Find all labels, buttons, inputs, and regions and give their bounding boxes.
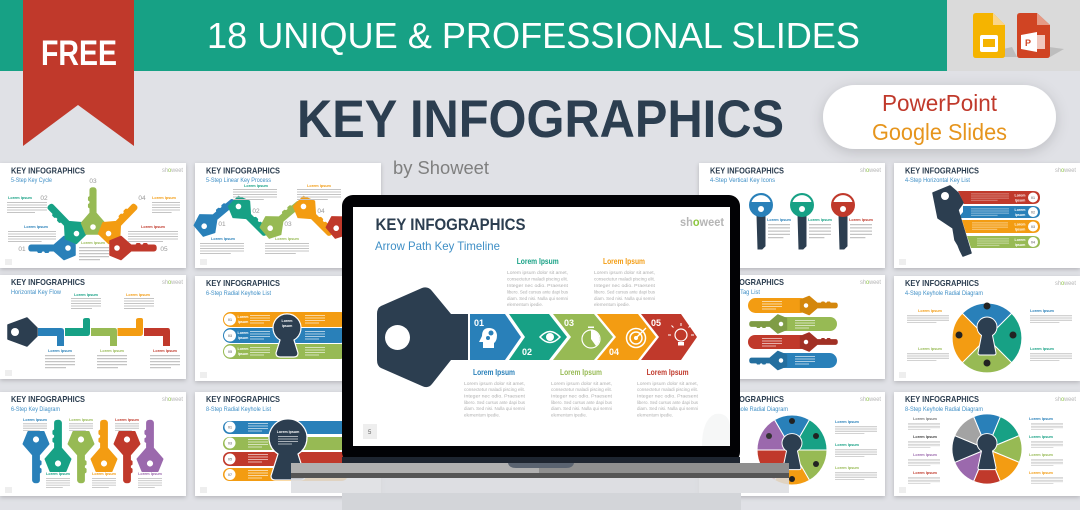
- panel: 5-step key cycle: Lorem Ipsum: [24, 225, 49, 229]
- panel: 4-step keyhole radial diagram: Lorem Ipsum: [918, 309, 943, 313]
- slide: text block 04: [594, 256, 656, 307]
- icon: powerpoint: P: [1025, 38, 1031, 48]
- panel: 4-step horizontal key list: [894, 163, 1080, 268]
- slide: text block 01: [464, 367, 526, 418]
- panel: 4-step horizontal key list: 02: [1031, 210, 1035, 214]
- panel: 8-step keyhole radial diagram: KEY INFOGRAPHICS: [905, 394, 979, 404]
- panel: 4-step vertical key icons: [699, 163, 885, 268]
- panel: 6-step radial keyhole list: Lorem: [282, 319, 292, 323]
- slide: text block 05: libero. Sed cursus ante dapi bus: [637, 400, 698, 405]
- slide: heading: Arrow Path Key Timeline: [375, 239, 500, 253]
- slide: text block 01: libero. Sed cursus ante dapi bus: [464, 400, 525, 405]
- slide: page number: 5: [368, 430, 372, 436]
- panel: 4-step vertical key icons: KEY INFOGRAPHICS: [710, 166, 784, 176]
- panel: 4-step horizontal key list: 03: [1031, 225, 1035, 229]
- panel: 4-step horizontal key list: Lorem: [1015, 238, 1025, 242]
- panel: 8-step keyhole radial diagram: Lorem Ipsum: [913, 471, 938, 475]
- slide: text block 02: elementum ipedie.: [507, 302, 543, 307]
- ribbon: free: FREE: [41, 34, 117, 73]
- slide: text block 02: Lorem Ipsum: [517, 256, 559, 266]
- panel: 6-step key diagram: Lorem Ipsum: [138, 472, 163, 476]
- panel: 5-step key cycle: 03: [89, 178, 97, 185]
- panel: 4-step horizontal key list: Ipsum: [1015, 243, 1025, 247]
- slide: text block 01: Integer nec odio. Praesent: [464, 394, 526, 398]
- panel: 6-step keyhole radial diagram: [699, 392, 885, 496]
- panel: 8-step keyhole radial diagram: Lorem Ipsum: [913, 453, 938, 457]
- panel: 5-step linear key process: KEY INFOGRAPHICS: [206, 166, 280, 176]
- panel: 8-step radial keyhole list: 01: [228, 426, 232, 430]
- step 02: [509, 314, 567, 360]
- slide: text block 04: Integer nec odio. Praesent: [594, 283, 656, 288]
- slide: text block 05: consectetur maladi piscing elit.: [637, 387, 698, 392]
- panel: 5-step key cycle: Lorem Ipsum: [141, 225, 166, 229]
- panel: 8-step keyhole radial diagram: Lorem Ipsum: [1029, 453, 1054, 457]
- panel: 6-step radial keyhole list: 01: [228, 318, 232, 322]
- slide: heading: [375, 215, 526, 253]
- slide: text block 04: diam. Sed nisi. Nulla qui semni: [594, 296, 655, 301]
- panel: 6-step radial keyhole list: Ipsum: [238, 352, 248, 356]
- slide: text block 03: libero. Sed cursus ante dapi bus: [551, 400, 612, 405]
- slide: text block 05: [637, 367, 699, 418]
- main title: KEY INFOGRAPHICS: [297, 90, 784, 149]
- panel: 6-step radial keyhole list: [195, 276, 381, 381]
- step 05: [641, 314, 697, 360]
- slide: text block 01: diam. Sed nisi. Nulla qui semni: [464, 406, 525, 411]
- panel: 4-step horizontal key list: Lorem: [1015, 208, 1025, 212]
- panel: 5-step linear key process: 04: [317, 208, 325, 215]
- slide: text block 03: Integer nec odio. Praesent: [551, 394, 613, 398]
- panel: 5-step key cycle: KEY INFOGRAPHICS: [11, 166, 85, 176]
- panel: 5-step key cycle: Lorem Ipsum: [8, 196, 33, 200]
- panel: 6-step radial keyhole list: Ipsum: [282, 324, 292, 328]
- panel: 5-step key cycle: [0, 163, 186, 268]
- panel: key tag list: [699, 275, 885, 379]
- panel: 4-step vertical key icons: Lorem Ipsum: [849, 218, 874, 222]
- panel: 8-step radial keyhole list: 03: [228, 442, 232, 446]
- slide: text block 02: libero. Sed cursus ante dapi bus: [507, 290, 568, 294]
- panel: 4-step keyhole radial diagram: [894, 276, 1080, 381]
- panel: 4-step vertical key icons: 4-Step Vertical Key Icons: [710, 177, 776, 184]
- panel: 5-step linear key process: Lorem Ipsum: [275, 237, 300, 241]
- panel: 4-step keyhole radial diagram: Lorem Ipsum: [1030, 347, 1055, 351]
- step 03: [553, 314, 613, 360]
- step 03: 03: [564, 318, 574, 328]
- panel: 6-step radial keyhole list: Ipsum: [238, 320, 248, 324]
- panel: 4-step horizontal key list: Ipsum: [1015, 228, 1025, 232]
- panel: 8-step keyhole radial diagram: showeet: [1055, 396, 1076, 403]
- panel: horizontal key flow: showeet: [162, 279, 183, 286]
- banner heading: 18 UNIQUE & PROFESSIONAL SLIDES: [207, 15, 860, 56]
- slide: text block 01: consectetur maladi piscing elit.: [464, 387, 525, 392]
- slide: watermark: [702, 414, 730, 446]
- panel: 5-step linear key process: Lorem Ipsum: [211, 237, 236, 241]
- slide: text block 03: [551, 367, 613, 418]
- panel: 5-step linear key process: [191, 163, 381, 268]
- panel: 4-step horizontal key list: Ipsum: [1015, 198, 1025, 202]
- panel: horizontal key flow: Lorem Ipsum: [153, 349, 178, 353]
- slide: text block 02: [507, 256, 569, 307]
- slide: text block 04: libero. Sed cursus ante dapi bus: [594, 290, 655, 294]
- panel: 5-step key cycle: 01: [18, 246, 26, 253]
- panel: 8-step radial keyhole list: 8-Step Radial Keyhole List: [206, 406, 271, 413]
- slide: text block 02: consectetur maladi piscing elit.: [507, 276, 568, 282]
- slide: heading: KEY INFOGRAPHICS: [376, 215, 526, 234]
- format pill: [823, 85, 1056, 149]
- laptop: [291, 195, 789, 478]
- panel: 5-step key cycle: Lorem Ipsum: [81, 241, 106, 245]
- panel: 5-step key cycle: 02: [40, 195, 48, 202]
- slide: text block 05: Integer nec odio. Praesent: [637, 394, 699, 398]
- panel: horizontal key flow: KEY INFOGRAPHICS: [11, 277, 85, 287]
- panel: 6-step radial keyhole list: KEY INFOGRAPHICS: [206, 278, 280, 288]
- slide: key head: [377, 287, 468, 387]
- format pill: Google Slides: [872, 119, 1007, 145]
- panel: 8-step keyhole radial diagram: Lorem Ipsum: [1029, 435, 1054, 439]
- slide: text block 01: elementum ipedie.: [464, 412, 500, 418]
- icon: powerpoint: [1017, 13, 1064, 58]
- format pill: PowerPoint: [882, 90, 998, 116]
- panel: 5-step linear key process: 03: [284, 221, 292, 228]
- panel: 4-step horizontal key list: Lorem: [1015, 222, 1025, 226]
- slide: text block 05: Lorem Ipsum: [647, 367, 689, 377]
- panel: 5-step linear key process: Lorem Ipsum: [307, 184, 332, 188]
- slide: text block 02: Integer nec odio. Praesent: [507, 283, 569, 288]
- arrow path timeline: [470, 314, 697, 360]
- panel: 6-step radial keyhole list: Ipsum: [238, 336, 248, 340]
- panel: 4-step vertical key icons: Lorem Ipsum: [808, 218, 833, 222]
- panel: 6-step keyhole radial diagram: Lorem Ipsum: [835, 443, 860, 447]
- panel: 8-step keyhole radial diagram: Lorem Ipsum: [1029, 417, 1054, 421]
- panel: 6-step keyhole radial diagram: Lorem Ipsum: [835, 466, 860, 470]
- panel: 4-step vertical key icons: Lorem Ipsum: [767, 218, 792, 222]
- panel: 4-step keyhole radial diagram: 4-Step Keyhole Radial Diagram: [905, 290, 983, 297]
- panel: 6-step radial keyhole list: Lorem: [238, 347, 248, 351]
- panel: 5-step key cycle: 04: [138, 195, 146, 202]
- panel: 6-step key diagram: Lorem Ipsum: [23, 418, 48, 422]
- panel: 8-step radial keyhole list: 07: [228, 473, 232, 477]
- panel: 5-step key cycle: Lorem Ipsum: [152, 196, 177, 200]
- slide: text block 05: diam. Sed nisi. Nulla qui semni: [637, 406, 698, 411]
- slide: showeet logo: showeet: [680, 215, 724, 229]
- slide: text block 04: consectetur maladi piscing elit.: [594, 276, 655, 282]
- panel: 4-step horizontal key list: KEY INFOGRAPHICS: [905, 166, 979, 176]
- slide: text block 03: diam. Sed nisi. Nulla qui semni: [551, 406, 612, 411]
- slide: text block 02: diam. Sed nisi. Nulla qui semni: [507, 296, 568, 301]
- panel: 8-step keyhole radial diagram: 8-Step Keyhole Radial Diagram: [905, 406, 983, 413]
- panel: 6-step radial keyhole list: 03: [228, 334, 232, 338]
- slide: text block 03: consectetur maladi piscing elit.: [551, 387, 612, 392]
- panel: 5-step linear key process: Lorem Ipsum: [244, 184, 269, 188]
- step 04: 04: [609, 347, 619, 357]
- panel: 5-step linear key process: 01: [218, 221, 226, 228]
- icon tray: [947, 0, 1080, 71]
- panel: 5-step key cycle: 05: [160, 246, 168, 253]
- panel: 6-step radial keyhole list: 05: [228, 350, 232, 354]
- panel: 5-step key cycle: showeet: [162, 167, 183, 174]
- panel: 4-step vertical key icons: showeet: [860, 167, 881, 174]
- panel: 6-step key diagram: Lorem Ipsum: [46, 472, 71, 476]
- panel: key tag list: 4-Step Key Tag List: [710, 289, 760, 296]
- panel: 8-step keyhole radial diagram: Lorem Ipsum: [913, 417, 938, 421]
- panel: 6-step key diagram: KEY INFOGRAPHICS: [11, 394, 85, 404]
- slide: text block 05: Lorem ipsum dolor sit amet,: [637, 381, 698, 386]
- panel: 4-step keyhole radial diagram: Lorem Ipsum: [918, 347, 943, 351]
- panel: 6-step key diagram: 6-Step Key Diagram: [11, 406, 60, 413]
- panel: 8-step radial keyhole list: KEY INFOGRAPHICS: [206, 394, 280, 404]
- panel: 4-step horizontal key list: 04: [1031, 240, 1035, 244]
- step 01: [470, 314, 521, 360]
- panel: 4-step horizontal key list: 01: [1031, 196, 1035, 200]
- ribbon: free: [23, 0, 134, 146]
- slide: text block 01: Lorem ipsum dolor sit amet,: [464, 381, 525, 386]
- panel: 6-step radial keyhole list: Lorem: [238, 331, 248, 335]
- panel: 6-step radial keyhole list: 6-Step Radial Keyhole List: [206, 290, 271, 297]
- slide: text block 04: elementum ipedie.: [594, 302, 630, 307]
- panel: 5-step linear key process: 5-Step Linear Key Process: [206, 177, 272, 184]
- panel: horizontal key flow: Lorem Ipsum: [100, 349, 125, 353]
- panel: 8-step radial keyhole list: 05: [228, 458, 232, 462]
- step 01: 01: [474, 318, 484, 328]
- panel: 4-step horizontal key list: showeet: [1055, 167, 1076, 174]
- panel: 6-step key diagram: showeet: [162, 396, 183, 403]
- panel: 5-step key cycle: 5-Step Key Cycle: [11, 177, 52, 184]
- panel: 4-step keyhole radial diagram: KEY INFOGRAPHICS: [905, 278, 979, 288]
- icon: google slides: [973, 13, 1017, 58]
- step 05: 05: [651, 318, 661, 328]
- panel: 8-step radial keyhole list: Lorem Ipsum: [277, 430, 299, 434]
- panel: 6-step key diagram: Lorem Ipsum: [69, 418, 94, 422]
- panel: 4-step keyhole radial diagram: Lorem Ipsum: [1030, 309, 1055, 313]
- panel: 8-step keyhole radial diagram: [894, 392, 1080, 496]
- panel: 4-step horizontal key list: Lorem: [1015, 194, 1025, 198]
- slide: text block 01: Lorem Ipsum: [473, 367, 515, 377]
- slide: text block 03: Lorem Ipsum: [560, 367, 602, 377]
- panel: 4-step horizontal key list: Ipsum: [1015, 213, 1025, 217]
- panel: 6-step keyhole radial diagram: 6-Step Keyhole Radial Diagram: [710, 406, 788, 413]
- slide: text block 02: Lorem ipsum dolor sit amet,: [507, 270, 568, 275]
- panel: 6-step radial keyhole list: Lorem: [238, 315, 248, 319]
- panel: horizontal key flow: Lorem Ipsum: [48, 349, 73, 353]
- panel: 8-step keyhole radial diagram: Lorem Ipsum: [1029, 471, 1054, 475]
- panel: 6-step keyhole radial diagram: showeet: [860, 396, 881, 403]
- panel: 5-step linear key process: 02: [252, 208, 260, 215]
- byline: by Showeet: [393, 158, 489, 178]
- slide: text block 05: elementum ipedie.: [637, 412, 673, 418]
- slide: text block 03: elementum ipedie.: [551, 412, 587, 418]
- panel: horizontal key flow: [0, 275, 186, 379]
- panel: key tag list: showeet: [860, 279, 881, 286]
- panel: 4-step horizontal key list: 4-Step Horizontal Key List: [905, 177, 970, 184]
- panel: 6-step key diagram: Lorem Ipsum: [115, 418, 140, 422]
- step 04: [597, 314, 656, 360]
- slide: page number: [363, 424, 377, 439]
- panel: horizontal key flow: Lorem Ipsum: [74, 293, 99, 297]
- slide: text block 04: Lorem ipsum dolor sit amet,: [594, 270, 655, 275]
- step 02: 02: [522, 347, 532, 357]
- laptop reflection: [291, 478, 789, 510]
- slide: text block 04: Lorem Ipsum: [603, 256, 645, 266]
- slide: text block 03: Lorem ipsum dolor sit amet,: [551, 381, 612, 386]
- panel: 4-step keyhole radial diagram: showeet: [1055, 280, 1076, 287]
- panel: key tag list: KEY INFOGRAPHICS: [710, 277, 784, 287]
- panel: 6-step key diagram: [0, 392, 186, 496]
- panel: 6-step keyhole radial diagram: KEY INFOGRAPHICS: [710, 394, 784, 404]
- panel: 6-step keyhole radial diagram: Lorem Ipsum: [835, 420, 860, 424]
- top banner: [0, 0, 947, 71]
- panel: horizontal key flow: Lorem Ipsum: [126, 293, 151, 297]
- panel: 8-step keyhole radial diagram: Lorem Ipsum: [913, 435, 938, 439]
- panel: 6-step key diagram: Lorem Ipsum: [92, 472, 117, 476]
- panel: 8-step radial keyhole list: [195, 392, 381, 496]
- panel: horizontal key flow: Horizontal Key Flow: [11, 289, 61, 296]
